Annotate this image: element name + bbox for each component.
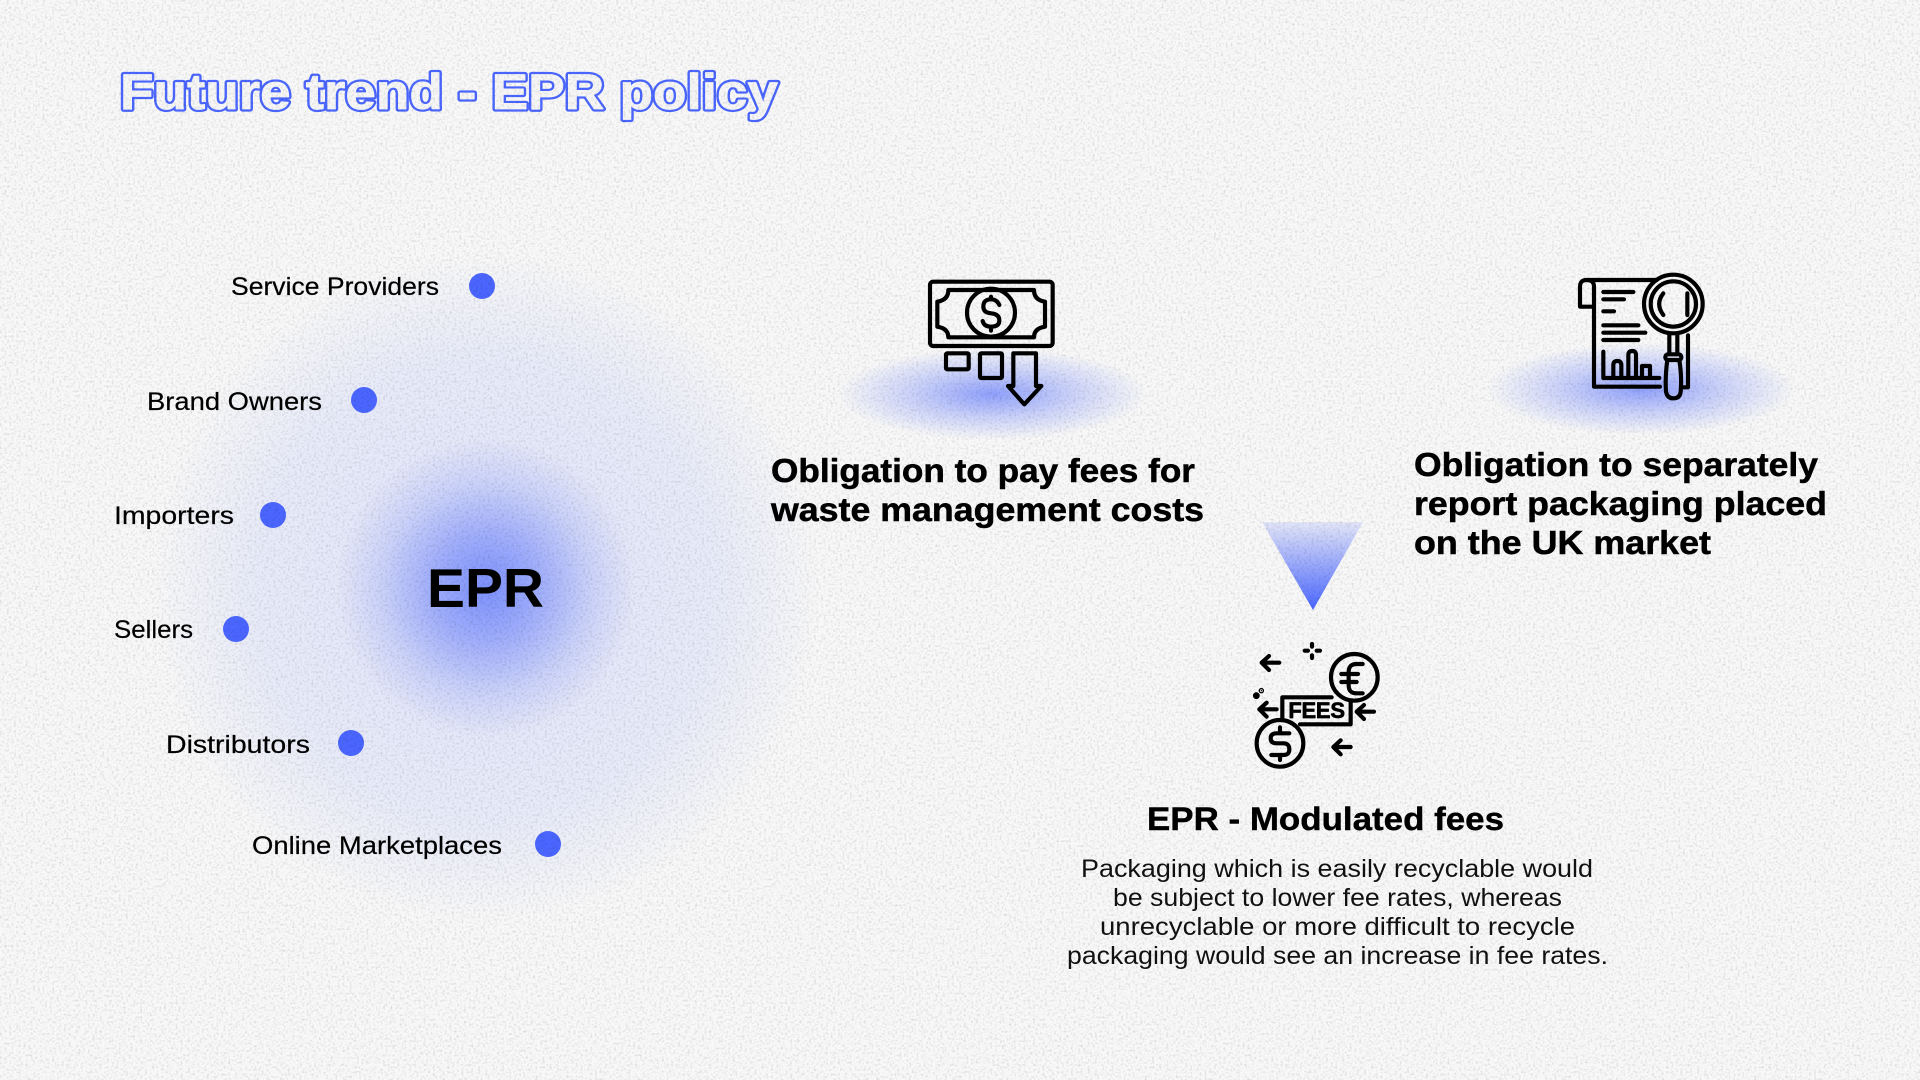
arrow: gradient triangle — [1262, 522, 1363, 610]
panel: pay fees — [770, 282, 1204, 528]
heading: obligation to pay — [770, 452, 1204, 528]
heading: obligation to pay: Obligation to pay fees for — [771, 452, 1195, 489]
glow under money icon — [837, 348, 1147, 440]
description text: be subject to lower fee rates, whereas — [1113, 884, 1562, 912]
item: Sellers: Sellers — [114, 616, 193, 644]
glow under report icon — [1486, 343, 1796, 435]
description text: unrecyclable or more difficult to recycle — [1100, 913, 1575, 941]
heading: obligation to report: on the UK market — [1414, 524, 1711, 561]
heading: EPR modulated fees: EPR - Modulated fees — [1147, 801, 1504, 837]
description text: packaging would see an increase in fee rates. — [1067, 942, 1608, 970]
description text: Packaging which is easily recyclable would — [1081, 855, 1593, 883]
panel: modulated fees — [1067, 644, 1608, 970]
heading: obligation to report: report packaging placed — [1414, 485, 1827, 522]
inner glow — [336, 438, 636, 738]
item: Distributors — [166, 730, 364, 759]
outer glow — [151, 253, 821, 923]
icon: fees with currency: FEES — [1288, 698, 1345, 723]
panel: EPR stakeholders — [114, 253, 821, 923]
heading: obligation to report: Obligation to separately — [1414, 446, 1819, 483]
heading: obligation to pay: waste management costs — [770, 491, 1204, 528]
item: Importers: Importers — [114, 502, 234, 530]
item: Sellers — [114, 616, 249, 644]
item: Distributors: Distributors — [166, 731, 310, 759]
icon: fees with currency — [1255, 644, 1378, 767]
panel: report packaging — [1414, 275, 1827, 561]
item: Importers — [114, 502, 286, 530]
EPR centre label: EPR — [427, 557, 544, 619]
description text — [1067, 855, 1608, 970]
item: Brand Owners: Brand Owners — [147, 388, 322, 416]
item: Service Providers: Service Providers — [231, 273, 439, 301]
icon: report with magnifier — [1580, 275, 1703, 398]
title: Future trend - EPR policy — [120, 64, 778, 120]
heading: obligation to report — [1414, 446, 1827, 561]
icon: banknote with down arrow — [930, 282, 1053, 404]
title: Future trend - EPR policy — [120, 64, 778, 120]
item: Online Marketplaces: Online Marketplaces — [252, 832, 502, 860]
item: Brand Owners — [147, 387, 377, 416]
